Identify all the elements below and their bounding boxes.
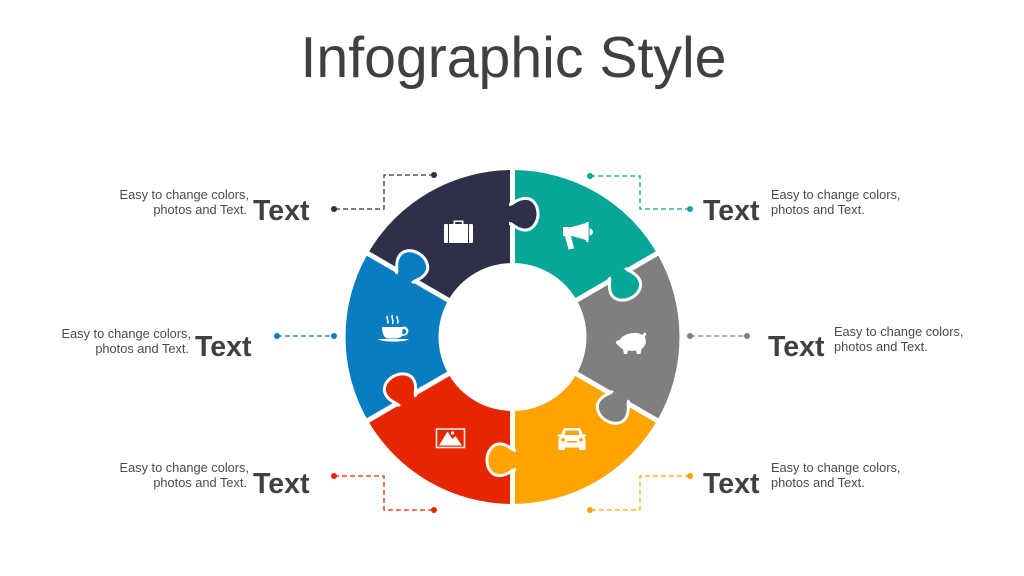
label: top right: Easy to change colors, [771,187,900,202]
label: top right: photos and Text. [771,202,865,217]
label: bottom right: Easy to change colors, [771,460,900,475]
segment: orange [512,374,657,504]
label: bottom left: photos and Text. [153,475,247,490]
puzzle tab: gray into orange [594,388,633,426]
label: top left [120,187,310,227]
title: Infographic Style [301,26,726,90]
label: middle left: Easy to change colors, [62,326,191,341]
puzzle tab: teal into gray [605,265,643,304]
segment: gray [577,254,679,420]
icon: picture [436,429,464,448]
icon: briefcase [444,220,473,243]
label: middle right: Text [768,331,825,363]
puzzle tab: blue into navy [392,248,431,286]
icon: megaphone [563,222,593,250]
puzzle ring chart [346,165,679,509]
icon: piggy bank [616,332,646,354]
connector: teal [587,173,693,212]
label: middle left [62,326,252,363]
icon: car [558,428,586,450]
label: top right [703,187,900,227]
label: middle left: Text [195,331,252,363]
connector: blue [274,333,337,339]
label: middle right [768,324,963,363]
puzzle tab: navy into teal [509,200,536,229]
segment: red [368,374,512,504]
puzzle tab: orange into red [488,445,516,474]
icon: coffee cup [378,315,409,342]
connector: orange [587,473,693,513]
label: bottom right: photos and Text. [771,475,865,490]
connector: navy [331,172,437,212]
label: middle left: photos and Text. [95,341,189,356]
segment: blue [346,254,448,420]
label: bottom left: Text [253,468,310,500]
segment: navy [368,170,512,300]
segment: teal [512,170,657,300]
label: top right: Text [703,195,760,227]
label: middle right: Easy to change colors, [834,324,963,339]
connector: gray [687,333,750,339]
connector: red [331,473,437,513]
label: top left: Easy to change colors, [120,187,249,202]
label: bottom left [120,460,310,500]
label: bottom left: Easy to change colors, [120,460,249,475]
puzzle tab: red into blue [382,370,420,409]
label: top left: Text [253,195,310,227]
label: top left: photos and Text. [153,202,247,217]
label: bottom right: Text [703,468,760,500]
label: bottom right [703,460,900,500]
label: middle right: photos and Text. [834,339,928,354]
